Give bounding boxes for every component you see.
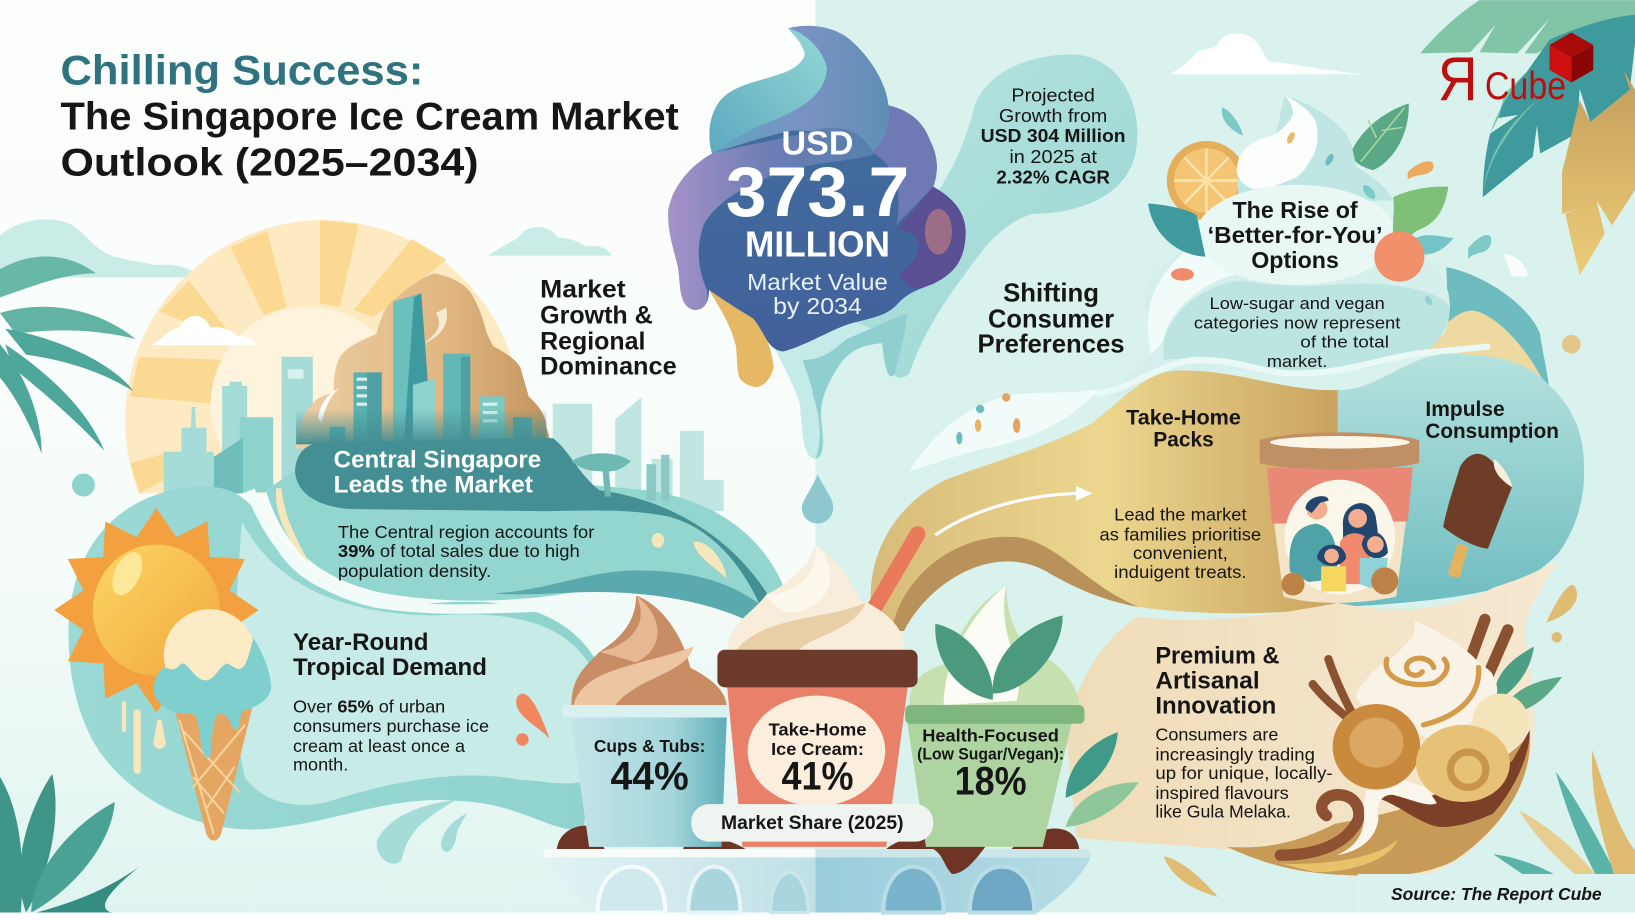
text: lead the market: convenient, [1133,543,1228,563]
cup: health-focused [905,585,1139,847]
text: projected growth: in 2025 at [1009,146,1098,167]
panel: better-for-you [1090,95,1551,398]
stat: 373.7 million: USD [782,125,853,162]
decorative drops [72,474,727,579]
scoops [1333,694,1529,802]
text: projected growth: Growth from [999,105,1107,126]
label: cups and tubs share: 44% [611,755,689,799]
text: urban consumers [293,696,489,775]
small decorative drops right [1171,108,1581,354]
label: health-focused share [917,726,1064,804]
projected growth bubble [834,54,1137,378]
panel: central ribbon [266,459,792,636]
heading: better for you: Options [1251,247,1339,273]
market share pill: Market Share (2025) [721,813,904,834]
leaf green right [1393,187,1448,245]
label: take-home share [768,719,867,799]
cloud left [0,219,200,278]
shifting consumer preferences heading: Preferences [978,331,1125,359]
cloud middle [488,227,612,256]
heading: year-round tropical demand: Tropical Demand [293,654,487,681]
heading: better for you [1207,197,1383,273]
cone drips [122,701,166,774]
panel: premium and artisanal [1066,560,1562,878]
source: Source: The Report Cube [1391,884,1602,904]
panel: impulse consumption band [1338,354,1584,607]
white splash with sprinkles [909,388,1100,471]
leaves bottom left [0,774,141,913]
icon: ice cream cone [153,609,271,841]
white cream [1356,621,1497,737]
white cloud over sun [151,316,257,345]
stat: 373.7 million: 373.7 [726,153,909,232]
sauce blobs [557,826,1079,874]
title [60,47,679,184]
source [1358,874,1635,913]
text: impulse consumption: Consumption [1425,420,1559,443]
text: central region: The Central region accounts for [338,522,595,542]
leaves [1495,647,1562,714]
logo: RCube [1438,32,1593,114]
chocolate swirl [1280,795,1359,855]
text: low sugar: market. [1267,352,1327,371]
text: consumers: inspired flavours [1155,783,1289,803]
heading: central singapore [334,446,541,498]
logo: RCube: Я [1438,44,1478,114]
big blob market value [668,26,966,387]
heading: premium [1155,642,1279,719]
white wave [1337,774,1437,855]
text: impulse consumption [1425,398,1559,443]
stat: 373.7 million [726,125,909,319]
white stripe [1095,346,1490,394]
text: projected growth: Projected [1011,84,1095,105]
dark ribbon accent [495,571,780,638]
icon: family ice cream tub [1260,432,1419,603]
right purple lobe [897,187,966,288]
cream swirl shadow [1238,95,1393,203]
text: consumers [1155,724,1333,822]
skyline right [553,397,724,514]
logo: RCube: Cube [1485,65,1566,108]
market share pill [691,804,933,842]
shifting consumer preferences heading: Shifting [1003,280,1099,308]
family figures [1289,496,1388,591]
text: consumers: Consumers are [1155,724,1278,744]
panel: central singapore leads the market [295,409,784,626]
leaf teal [1148,203,1205,257]
leaves bottom right [1493,750,1635,874]
yellow strip [1280,840,1397,872]
title: The Singapore Ice Cream Market [60,95,679,138]
text: urban consumers: Over 65% of urban [293,696,445,716]
heading: market growth: Regional [540,327,645,355]
small trees [571,453,669,501]
text: consumers: increasingly trading [1155,744,1315,764]
shifting consumer preferences heading [978,280,1125,359]
text: urban consumers: consumers purchase ice [293,716,489,736]
text: lead the market: Lead the market [1114,504,1247,524]
heading: better for you: ‘Better-for-You’ [1207,222,1383,248]
text: take-home packs: Take-Home [1126,406,1241,430]
heading: market growth: Growth & [540,301,653,329]
splash orange [516,694,550,746]
icon: popsicle [1443,454,1512,577]
heading: market growth: Dominance [540,352,677,380]
palm leaves left [0,256,136,454]
text: lead the market [1100,504,1261,582]
leaf green top [1350,103,1409,170]
text: low sugar [1194,294,1401,371]
teal swirl highlight [709,28,827,153]
text: consumers: like Gula Melaka. [1155,802,1291,822]
label: health-focused share: (Low Sugar/Vegan): [917,745,1064,763]
text: low sugar: Low-sugar and vegan [1210,294,1385,313]
right lobe [871,105,937,224]
text: consumers: up for unique, locally- [1155,763,1333,783]
big ice cream drips [771,313,907,524]
lower blob [1164,281,1449,372]
outer blob [1090,209,1450,398]
text: central region: population density. [338,561,491,581]
splash teal [377,800,467,864]
caramel wave [1227,735,1530,876]
decorative tan drops [1164,585,1577,897]
arrow [935,486,1093,535]
ice cream swirl behind city [296,273,553,449]
wave right [1446,267,1549,393]
straw [875,534,918,607]
label: health-focused share: Health-Focused [922,726,1059,746]
label: take-home share: Take-Home [768,719,867,739]
label: take-home share: Ice Cream: [771,739,864,759]
heading: central singapore: Leads the Market [334,471,533,498]
label: health-focused share: 18% [955,760,1027,804]
stat: 373.7 million: by 2034 [773,293,862,319]
city towers [330,293,532,451]
scoop [1196,185,1396,285]
text: take-home packs: Packs [1153,427,1214,451]
cream swirl white [1237,95,1318,189]
skyline left [164,357,313,493]
heading: better for you: The Rise of [1233,197,1358,223]
peach [1374,232,1454,282]
heading: premium: Premium & [1155,642,1279,669]
top swirl [709,26,889,154]
text: projected growth: 2.32% CAGR [996,167,1110,188]
heading: year-round tropical demand [293,629,487,681]
title: Outlook (2025–2034) [60,141,479,184]
text: central region: 39% of total sales due to high [338,541,580,561]
text: projected growth: USD 304 Million [981,125,1126,146]
cloud top right [1170,33,1363,74]
stat: 373.7 million: MILLION [745,224,890,265]
text: low sugar: categories now represent [1194,314,1401,333]
text: projected growth [981,84,1126,188]
leaves on cup [935,615,1063,700]
sun rays [125,220,512,494]
heading: market growth [540,275,677,380]
panel: take-home packs band [871,370,1338,631]
text: urban consumers: month. [293,755,348,775]
cinnamon sticks [1313,620,1508,718]
text: take-home packs [1126,406,1241,451]
purple left lobe [668,128,874,310]
heading: premium: Innovation [1155,692,1276,719]
stat: 373.7 million: Market Value [747,269,888,295]
label: take-home share: 41% [782,755,853,799]
ribbon highlight [250,490,649,647]
orange slice [1167,141,1246,220]
chocolate band [1376,730,1530,827]
panel: year-round tropical demand [69,486,605,830]
label: cups and tubs share [594,736,705,799]
label: cups and tubs share: Cups & Tubs: [594,736,705,756]
text: lead the market: induigent treats. [1114,562,1247,582]
text: lead the market: as families prioritise [1100,524,1261,544]
pedestal [543,849,1091,913]
cup: cups and tubs [562,596,729,847]
shifting consumer preferences heading: Consumer [988,306,1114,334]
text: low sugar: of the total [1300,332,1389,351]
caramel curl [1386,658,1479,725]
cup: take-home ice cream [717,544,918,847]
heading: central singapore: Central Singapore [334,446,541,473]
text: impulse consumption: Impulse [1425,398,1505,421]
palm top right [1420,0,1635,275]
text: central region [338,522,595,581]
heading: premium: Artisanal [1155,667,1260,694]
icon: sun [54,508,259,712]
heading: market growth: Market [540,275,626,303]
heading: year-round tropical demand: Year-Round [293,629,429,656]
text: urban consumers: cream at least once a [293,736,466,756]
title: Chilling Success: [60,47,423,94]
